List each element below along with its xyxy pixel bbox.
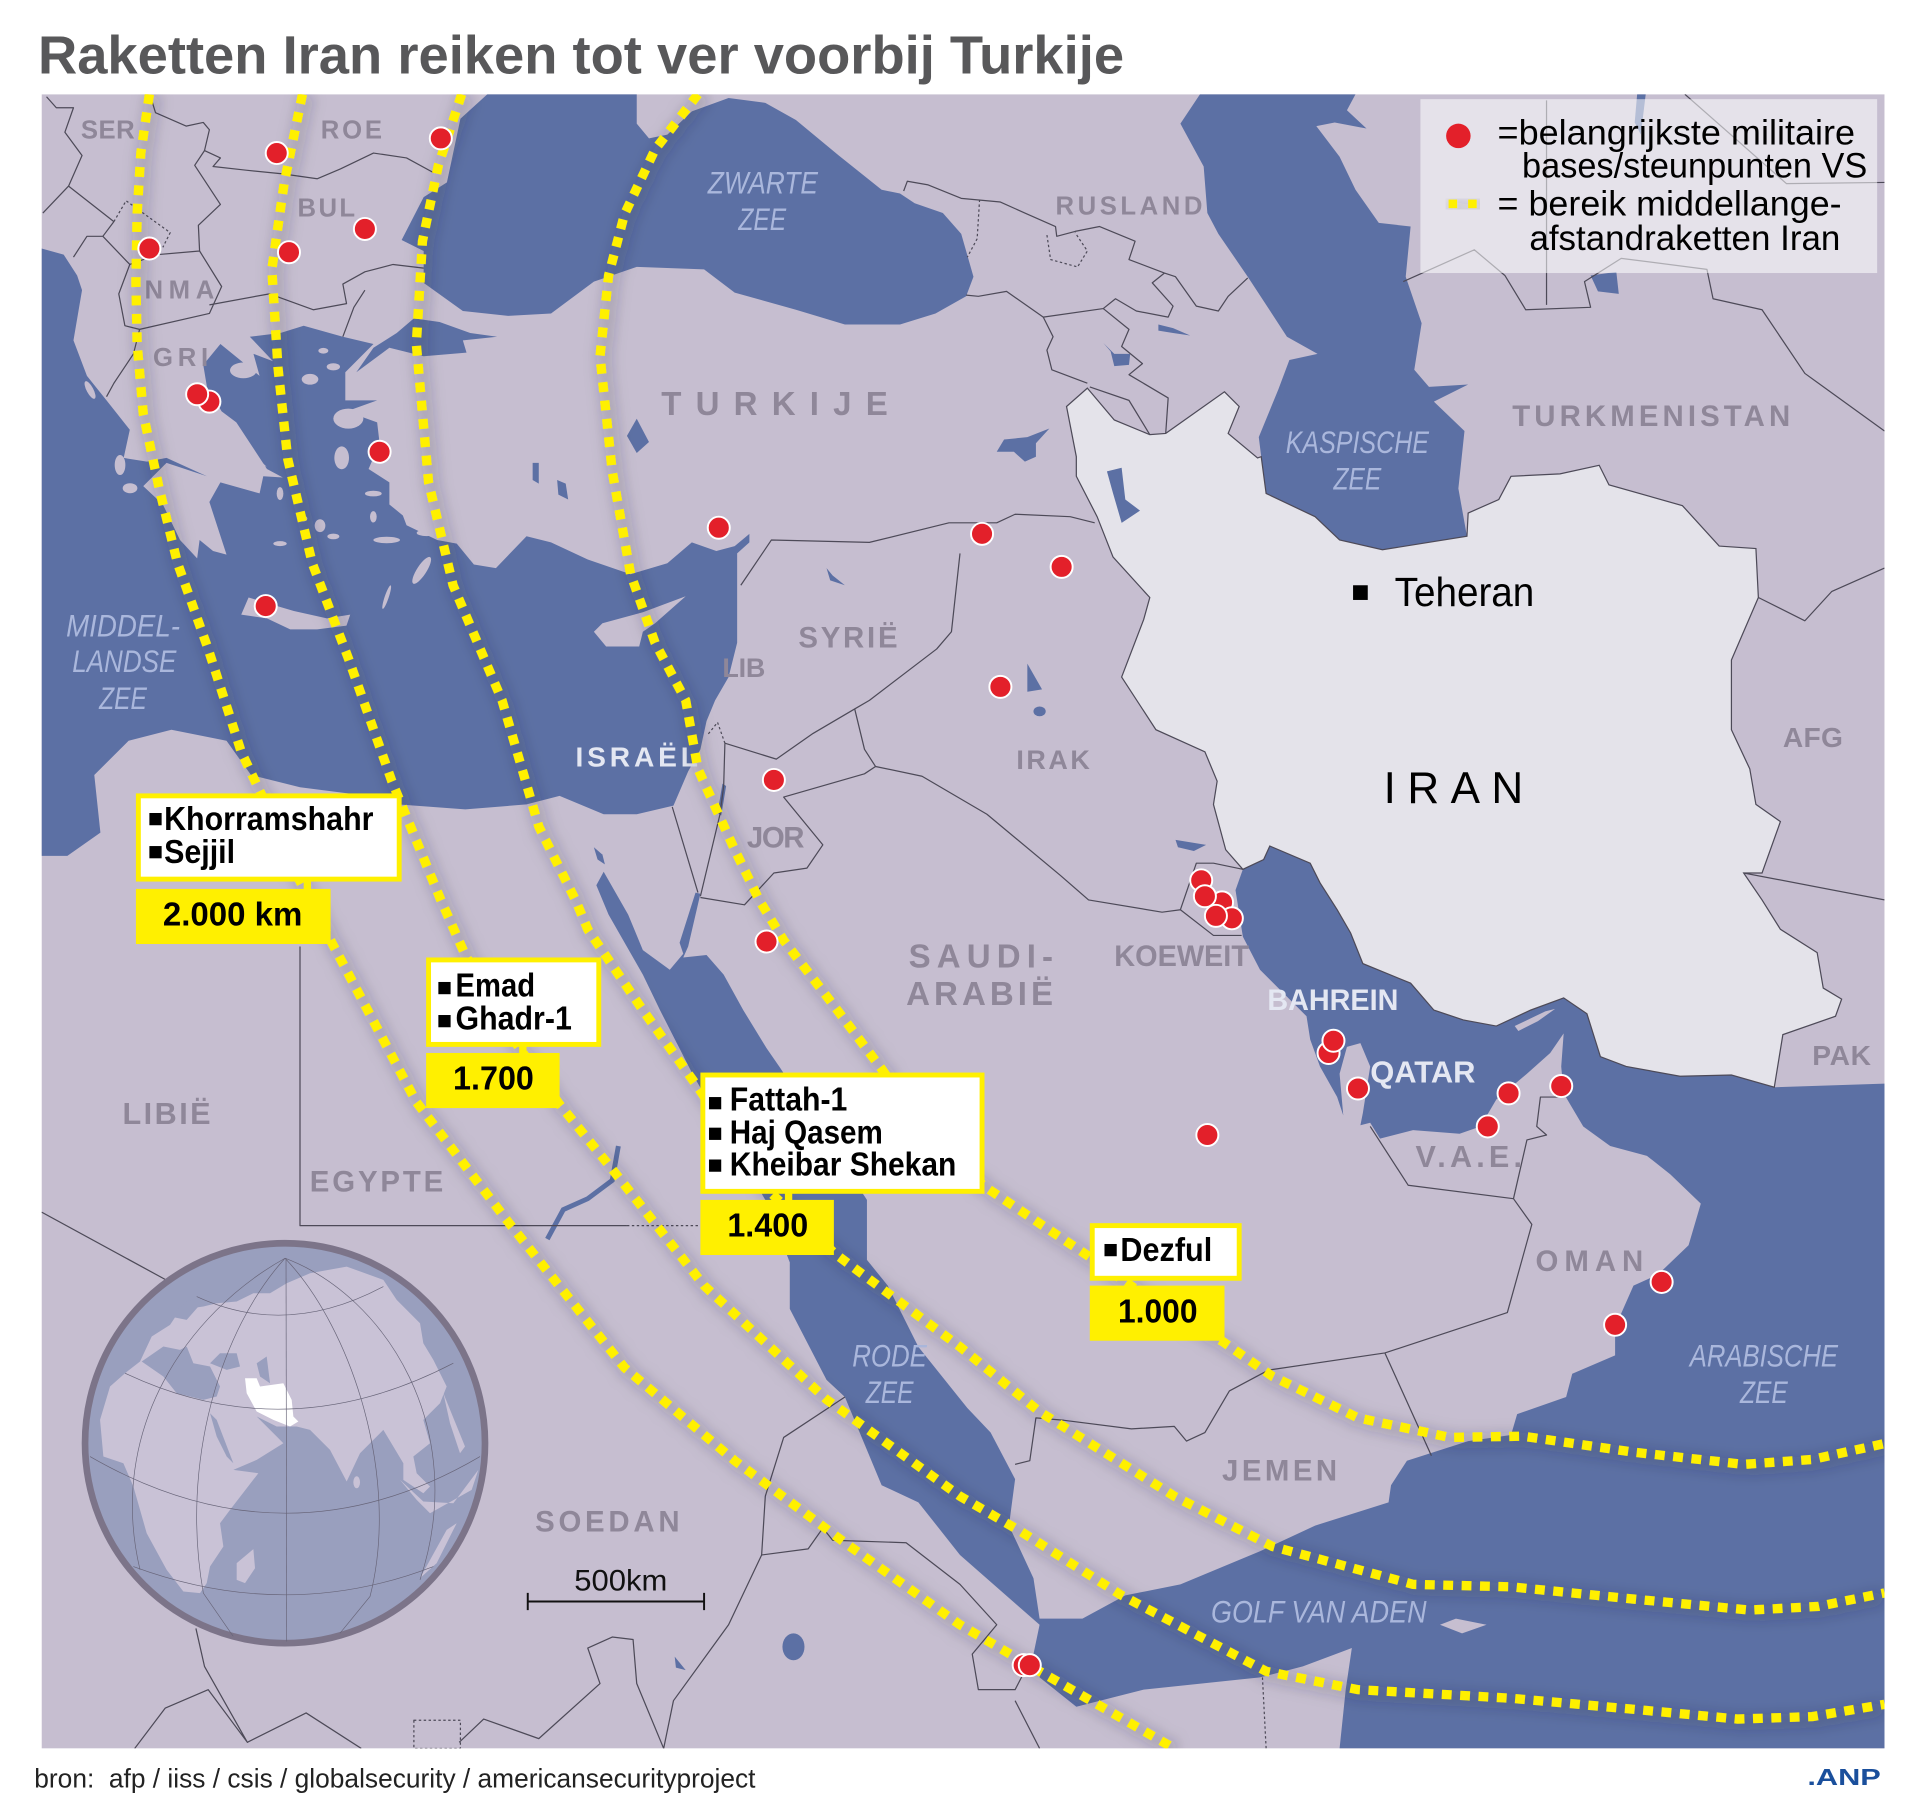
source line: bron: afp / iiss / csis / globalsecurity / americansecurityproject bbox=[34, 1764, 756, 1794]
country labels: SER bbox=[81, 116, 135, 144]
country labels: ARABIË bbox=[906, 976, 1053, 1013]
inset globe bbox=[85, 1243, 485, 1643]
callout: 1000 km missile: Dezful bbox=[1120, 1232, 1212, 1269]
lakes bbox=[533, 94, 1646, 1670]
legend: bases/steunpunten VS bbox=[1522, 146, 1867, 186]
island: Socotra bbox=[1440, 1619, 1487, 1633]
arc: 1700 km bbox=[272, 94, 1884, 1719]
sea: Mediterranean bbox=[42, 247, 749, 856]
military bases bbox=[138, 127, 1673, 1676]
country labels: JEMEN bbox=[1222, 1454, 1337, 1487]
globe: Madagascar bbox=[237, 1549, 255, 1583]
sea: Caspian bbox=[1180, 94, 1468, 550]
globe: Sri Lanka bbox=[353, 1476, 360, 1488]
sea labels: MIDDEL- bbox=[66, 608, 180, 644]
country labels: NMA bbox=[144, 277, 214, 305]
country labels: SAUDI- bbox=[909, 938, 1053, 975]
sea labels: GOLF VAN ADEN bbox=[1211, 1593, 1427, 1629]
globe: Indonesia bbox=[400, 1470, 478, 1513]
callout: 1700 km missiles: 1.700 bbox=[453, 1061, 534, 1098]
country labels: ROE bbox=[321, 116, 382, 144]
country labels: AFG bbox=[1783, 722, 1843, 753]
country labels: TURKIJE bbox=[661, 386, 888, 423]
sea labels: ZWARTE bbox=[707, 164, 819, 200]
country labels: JOR bbox=[747, 821, 804, 854]
sea labels bbox=[66, 164, 1839, 1629]
country labels: RUSLAND bbox=[1056, 192, 1202, 220]
country labels: SYRIË bbox=[798, 622, 898, 655]
country labels: IRAK bbox=[1016, 745, 1090, 775]
country labels: KOEWEIT bbox=[1114, 940, 1249, 973]
scale bar bbox=[528, 1564, 704, 1610]
sea labels: RODE bbox=[852, 1337, 928, 1373]
sea labels: ZEE bbox=[1739, 1374, 1788, 1410]
callout: 2000 km missiles: 2.000 km bbox=[163, 897, 302, 934]
country labels: BUL bbox=[298, 195, 355, 223]
arc: 1400 km bbox=[416, 94, 1884, 1610]
label: Iran and Teheran bbox=[1353, 569, 1534, 813]
island: Qeshm bbox=[1515, 1009, 1555, 1031]
country labels: OMAN bbox=[1536, 1245, 1643, 1278]
scale bar: 500km bbox=[574, 1564, 667, 1597]
legend: base text: =belangrijkste militaire bbox=[1498, 112, 1855, 152]
land: Iran bbox=[1067, 388, 1842, 1087]
callout: 1700 km missiles: Emad bbox=[456, 968, 535, 1005]
callout: 1700 km missiles: Ghadr-1 bbox=[456, 1001, 572, 1038]
callout: 1400 km missiles bbox=[700, 1075, 982, 1255]
country labels: SOEDAN bbox=[535, 1506, 680, 1539]
legend: range marker bbox=[1449, 200, 1477, 208]
title: Raketten Iran reiken tot ver voorbij Turkije bbox=[38, 25, 1124, 85]
arc: 1000 km bbox=[600, 94, 1884, 1464]
callout: 2000 km missiles: Sejjil bbox=[164, 834, 235, 871]
sea labels: ARABISCHE bbox=[1688, 1337, 1839, 1373]
country labels: ISRAËL bbox=[576, 741, 698, 772]
country labels: EGYPTE bbox=[310, 1165, 443, 1198]
callout: 1400 km missiles: Kheibar Shekan bbox=[730, 1146, 956, 1183]
sea: Persian Gulf, Arabian Sea, Red Sea, Gulf of Aden bbox=[596, 846, 1884, 1748]
country labels: TURKMENISTAN bbox=[1512, 400, 1790, 433]
country labels bbox=[81, 116, 1872, 1539]
arc: 2000 km bbox=[136, 94, 1174, 1748]
country labels: BAHREIN bbox=[1267, 984, 1398, 1017]
Greek and Aegean islands bbox=[82, 348, 437, 610]
legend: base marker bbox=[1446, 124, 1471, 148]
legend: range text: = bereik middellange- bbox=[1498, 183, 1842, 223]
logo: ANP: .ANP bbox=[1807, 1764, 1881, 1790]
callout: 2000 km missiles: Khorramshahr bbox=[164, 801, 374, 838]
callout: 1400 km missiles: Fattah-1 bbox=[730, 1082, 847, 1119]
globe land: Afro-Eurasia bbox=[100, 1267, 447, 1593]
country labels: GRI bbox=[153, 344, 208, 372]
country labels: LIB bbox=[722, 653, 765, 683]
sea labels: ZEE bbox=[1333, 461, 1382, 497]
legend: afstandraketten Iran bbox=[1529, 218, 1840, 258]
sea: Black Sea bbox=[402, 94, 973, 324]
callout: 1000 km missile: 1.000 bbox=[1118, 1293, 1198, 1330]
sea labels: ZEE bbox=[98, 680, 148, 716]
label: Iran and Teheran: Teheran bbox=[1395, 569, 1534, 615]
legend bbox=[1420, 99, 1877, 273]
globe graticule bbox=[90, 1258, 480, 1642]
callout: 1700 km missiles bbox=[426, 960, 599, 1108]
label: Iran and Teheran: IRAN bbox=[1384, 764, 1523, 813]
country labels: LIBIË bbox=[122, 1097, 211, 1131]
callout: 1000 km missile bbox=[1090, 1226, 1239, 1341]
country labels: V.A.E. bbox=[1416, 1140, 1522, 1174]
island: Cyprus bbox=[594, 596, 686, 646]
callout: 2000 km missiles bbox=[136, 796, 399, 944]
globe: Australia bbox=[420, 1523, 457, 1578]
globe seas bbox=[142, 1347, 220, 1400]
sea: Marmara bbox=[356, 318, 497, 372]
island: Crete bbox=[241, 598, 350, 629]
globe: Iran bbox=[245, 1378, 298, 1427]
sea labels: ZEE bbox=[738, 201, 787, 237]
globe: Philippines bbox=[443, 1393, 465, 1453]
callout: 1400 km missiles: Haj Qasem bbox=[730, 1115, 883, 1152]
callout: 1400 km missiles: 1.400 bbox=[727, 1208, 808, 1245]
sea labels: KASPISCHE bbox=[1286, 424, 1430, 460]
sea labels: LANDSE bbox=[72, 643, 177, 679]
sea labels: ZEE bbox=[865, 1374, 914, 1410]
country labels: QATAR bbox=[1370, 1055, 1476, 1089]
country labels: PAK bbox=[1812, 1040, 1872, 1071]
